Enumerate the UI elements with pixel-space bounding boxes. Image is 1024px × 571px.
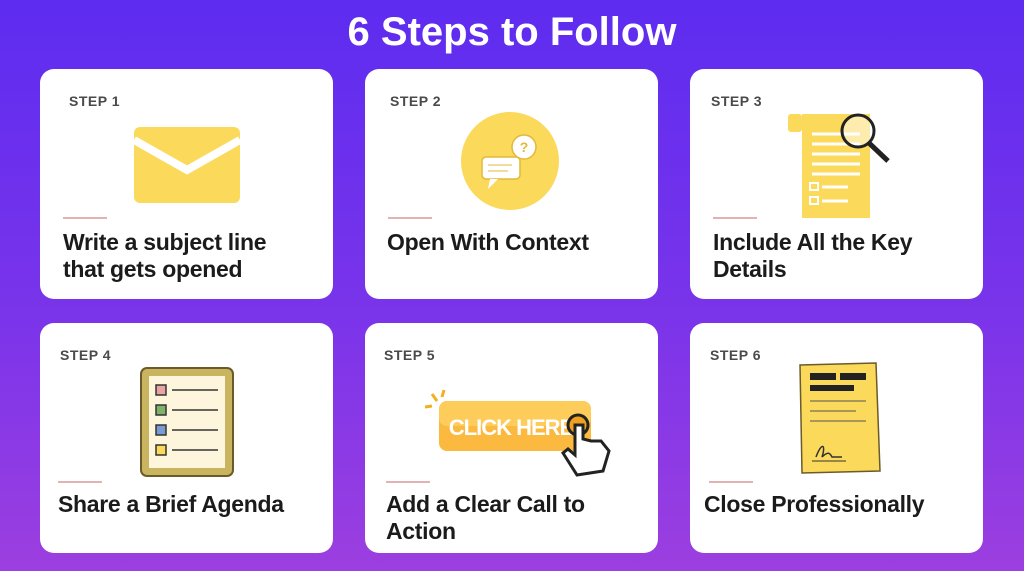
title: 6 Steps to Follow (348, 10, 676, 54)
icon: document with magnifier (788, 114, 890, 218)
panel: step 3 (690, 69, 983, 299)
heading 5 (386, 491, 585, 544)
icon: click here button (425, 390, 611, 477)
heading 1 (63, 229, 266, 282)
icon: signed document (799, 362, 881, 474)
heading 1: that gets opened (63, 256, 242, 282)
step label 3: STEP 3 (711, 93, 762, 109)
heading 5: Add a Clear Call to (386, 491, 585, 517)
step label 6: STEP 6 (710, 347, 761, 363)
icon: click here button: CLICK HERE (449, 415, 574, 440)
panel: step 2 (365, 69, 658, 299)
heading 3 (713, 229, 912, 282)
heading 6: Close Professionally (704, 491, 924, 517)
heading 5: Action (386, 518, 456, 544)
panel: step 6 (690, 323, 983, 553)
heading 2: Open With Context (387, 229, 589, 255)
step label 4: STEP 4 (60, 347, 111, 363)
heading 1: Write a subject line (63, 229, 266, 255)
panel: step 5 (365, 323, 658, 553)
icon: chat bubbles: ? (520, 139, 528, 155)
heading 3: Include All the Key (713, 229, 912, 255)
step label 1: STEP 1 (69, 93, 120, 109)
step label 5: STEP 5 (384, 347, 435, 363)
heading 4: Share a Brief Agenda (58, 491, 284, 517)
icon: envelope (134, 127, 240, 203)
icon: chat bubbles (461, 112, 559, 210)
panel: step 1 (40, 69, 333, 299)
panel: step 4 (40, 323, 333, 553)
icon: checklist board (140, 367, 234, 477)
step label 2: STEP 2 (390, 93, 441, 109)
heading 3: Details (713, 256, 786, 282)
